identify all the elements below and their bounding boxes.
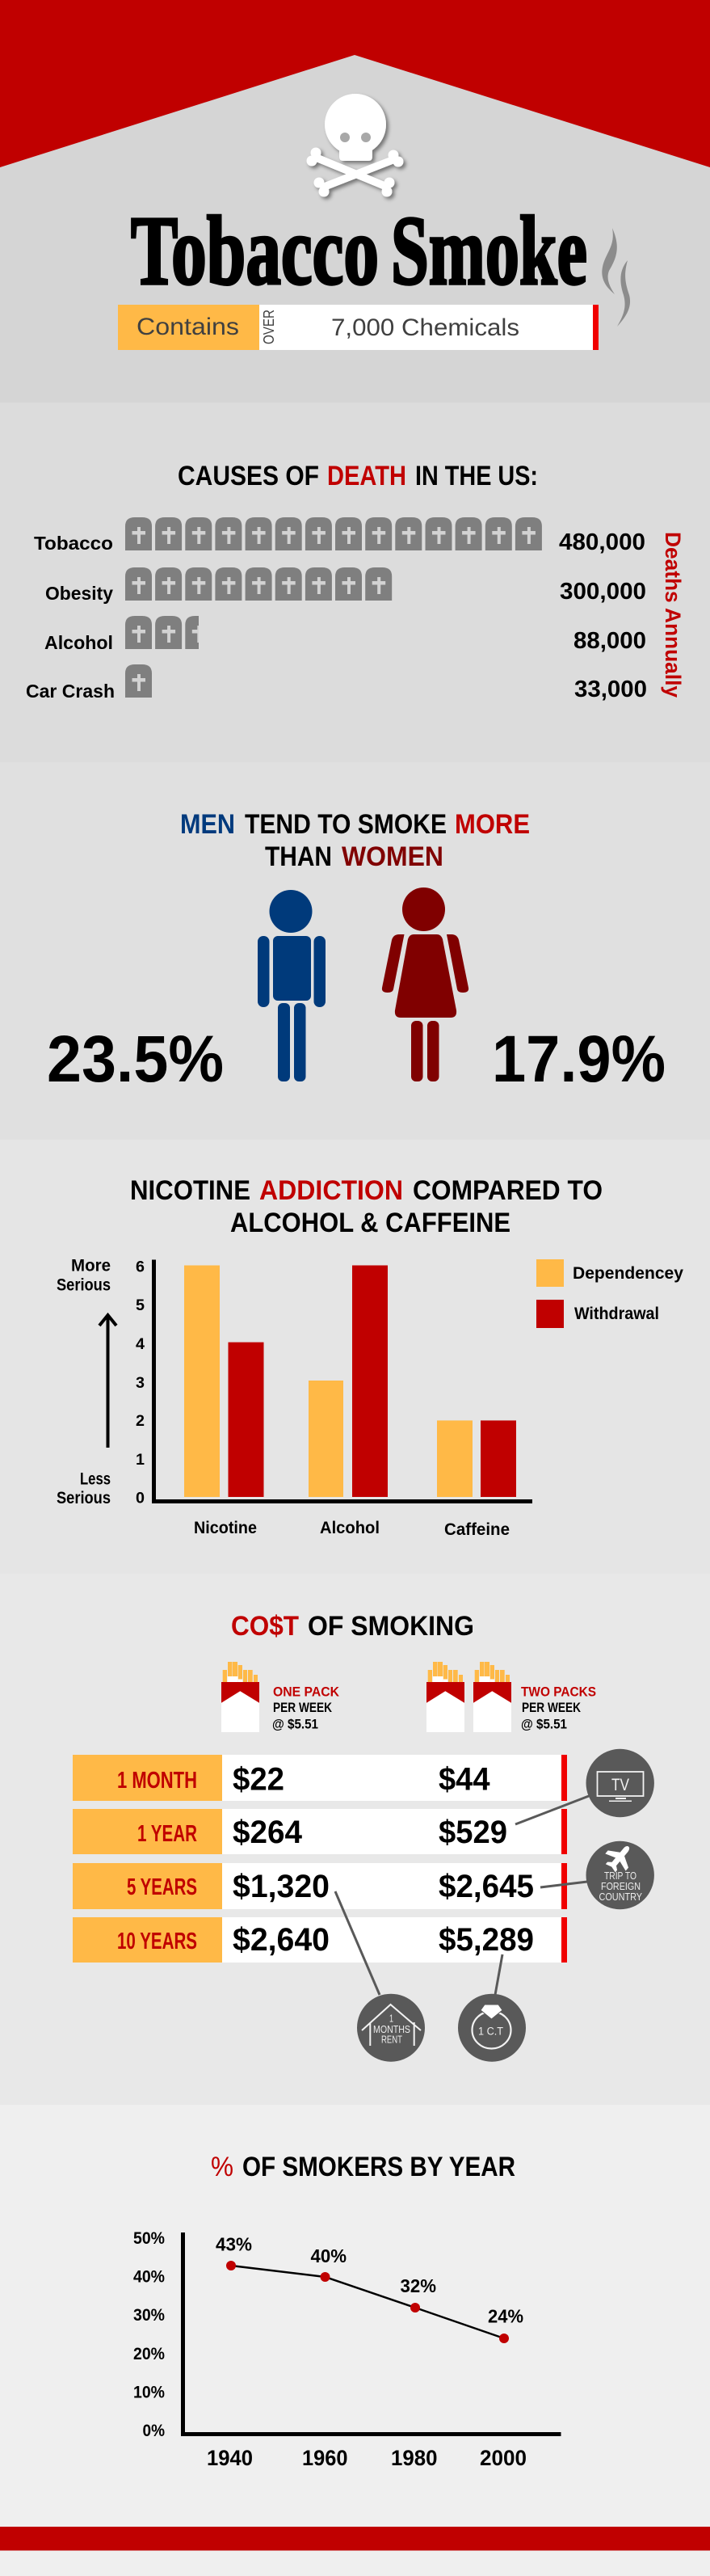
row: tobacco: [34, 517, 645, 555]
legend: Dependencey: [573, 1264, 683, 1283]
text: one pack per week: PER WEEK: [273, 1701, 332, 1715]
callout: trip to foreign country: FOREIGN: [601, 1881, 641, 1892]
row: 1 month: $44: [439, 1762, 490, 1798]
row: 10 years: $2,640: [233, 1922, 330, 1958]
heading: men tend to smoke more than women: MEN: [180, 809, 235, 840]
heading: percent of smokers: OF SMOKERS BY YEAR: [242, 2152, 515, 2182]
severity scale labels: Serious: [57, 1489, 111, 1507]
heading: percent of smokers: %: [211, 2152, 233, 2182]
icon: two packs: [426, 1662, 511, 1732]
callout: trip to foreign country: COUNTRY: [599, 1891, 643, 1903]
y axis labels: 40%: [133, 2268, 165, 2286]
bars: nicotine: [184, 1266, 263, 1497]
axis label: deaths annually: Deaths Annually: [661, 532, 685, 698]
heading: cost of smoking: [231, 1611, 474, 1642]
y axis labels: 50%: [133, 2229, 165, 2248]
row: tobacco: 480,000: [559, 529, 645, 555]
row: 5 years: [73, 1863, 567, 1909]
y axis labels: [133, 2229, 165, 2440]
severity scale labels: More: [71, 1256, 111, 1275]
row: alcohol: 88,000: [573, 628, 646, 654]
callout: trip to foreign country: TRIP TO: [604, 1870, 636, 1882]
data line: [231, 2266, 504, 2338]
legend: Withdrawal: [574, 1305, 659, 1323]
row: 1 year: $264: [233, 1815, 303, 1850]
stat: men percent: 23.5%: [47, 1022, 224, 1096]
heading: causes of death: [178, 461, 538, 491]
callout lines: [335, 1796, 589, 1995]
row: 5 years: 5 YEARS: [127, 1874, 197, 1900]
severity scale labels: [57, 1256, 111, 1507]
row: obesity: 300,000: [560, 579, 646, 605]
y axis labels: 20%: [133, 2345, 165, 2363]
row: tobacco: Tobacco: [34, 533, 113, 554]
callout: tv: TV: [611, 1776, 629, 1794]
text: two packs per week: @ $5.51: [521, 1717, 567, 1731]
legend: [536, 1259, 683, 1328]
y axis labels: 5: [136, 1297, 145, 1314]
panel: percent of smokers by year: [133, 2152, 561, 2470]
value labels: 43%: [216, 2234, 252, 2255]
year labels: 1940: [207, 2446, 253, 2470]
row: car crash: Car Crash: [26, 681, 115, 702]
heading: men tend to smoke more than women: WOMEN: [342, 841, 443, 872]
cigarette bar: contains over 7,000 chemicals: Contains: [137, 314, 239, 340]
year labels: 1960: [302, 2446, 347, 2470]
panel: causes of death: [26, 461, 685, 702]
panel: nicotine addiction: [57, 1175, 683, 1539]
icon: smoke wisps: [602, 228, 630, 327]
year labels: 2000: [480, 2446, 527, 2470]
y axis labels: [136, 1259, 145, 1507]
row: car crash: [26, 664, 647, 702]
row: obesity: Obesity: [45, 583, 113, 604]
text: two packs per week: PER WEEK: [522, 1701, 581, 1715]
y axis labels: 10%: [133, 2383, 165, 2402]
category labels: [194, 1519, 510, 1539]
icon: woman: [382, 887, 468, 1081]
y axis labels: 3: [136, 1375, 145, 1392]
heading: nicotine addiction compared: NICOTINE: [130, 1175, 250, 1206]
row: 1 year: 1 YEAR: [137, 1821, 197, 1847]
callout: tv: [586, 1749, 654, 1817]
heading: causes of death: DEATH: [327, 461, 406, 491]
line chart: [133, 2229, 561, 2470]
data points: [226, 2261, 509, 2343]
heading: men tend to smoke more than women: TEND TO SMOKE: [245, 809, 447, 840]
y axis labels: 0%: [142, 2422, 165, 2440]
category labels: Nicotine: [194, 1519, 257, 1537]
severity scale labels: Serious: [57, 1275, 111, 1295]
axes: [181, 2232, 561, 2436]
text: one pack per week: [272, 1684, 339, 1731]
severity scale labels: Less: [80, 1469, 111, 1489]
heading: causes of death: IN THE US:: [415, 461, 538, 491]
y axis labels: 1: [136, 1452, 145, 1469]
category labels: Alcohol: [320, 1519, 380, 1537]
title: Smoke: [391, 196, 587, 306]
y axis labels: 0: [136, 1490, 145, 1507]
text: one pack per week: ONE PACK: [273, 1684, 339, 1699]
cigarette bar: contains over 7,000 chemicals: OVER: [261, 310, 277, 344]
category labels: Caffeine: [444, 1520, 510, 1539]
row: 1 year: $529: [439, 1815, 507, 1850]
y axis labels: 30%: [133, 2306, 165, 2325]
bar chart: [136, 1259, 532, 1539]
axes: [152, 1259, 532, 1503]
row: car crash: 33,000: [574, 677, 647, 702]
bars: alcohol: [309, 1266, 388, 1497]
row: alcohol: Alcohol: [44, 632, 113, 653]
panel: men vs women: [47, 809, 666, 1096]
row: 5 years: $2,645: [439, 1869, 534, 1904]
heading: cost of smoking: OF SMOKING: [308, 1611, 474, 1642]
icon: skull and crossbones: [307, 94, 404, 197]
bars: caffeine: [437, 1420, 516, 1497]
callout: 1 months rent: [357, 1994, 425, 2062]
title: Tobacco: [131, 196, 379, 306]
callout: 1 months rent: MONTHS: [373, 2024, 410, 2035]
heading: men tend to smoke more than women: [180, 809, 530, 872]
heading: nicotine addiction compared: COMPARED TO: [413, 1175, 603, 1206]
row: 1 month: 1 MONTH: [117, 1768, 197, 1794]
callout: 1 carat ring: 1 C.T: [478, 2025, 503, 2037]
cigarette bar: contains over 7,000 chemicals: 7,000 Chemicals: [331, 314, 519, 341]
row: 5 years: $1,320: [233, 1869, 330, 1904]
row: 10 years: $5,289: [439, 1922, 534, 1958]
pack lid red chevron: [0, 0, 710, 167]
row: 10 years: [73, 1917, 567, 1963]
text: two packs per week: TWO PACKS: [521, 1684, 596, 1699]
row: alcohol: [44, 616, 646, 654]
heading: causes of death: CAUSES OF: [178, 461, 319, 491]
row: 1 month: $22: [233, 1762, 284, 1798]
value labels: 40%: [310, 2245, 347, 2266]
heading: nicotine addiction compared: ALCOHOL & CAFFEINE: [230, 1208, 510, 1238]
y axis labels: 4: [136, 1336, 145, 1353]
panel: header: [0, 0, 710, 350]
stat: women percent: 17.9%: [492, 1022, 666, 1096]
cigarette bar: contains over 7,000 chemicals: [118, 305, 599, 350]
year labels: [207, 2446, 527, 2470]
row: 10 years: 10 YEARS: [117, 1929, 197, 1954]
callout: trip to foreign country: [586, 1838, 654, 1909]
heading: men tend to smoke more than women: MORE: [455, 809, 530, 840]
y axis labels: 6: [136, 1259, 145, 1275]
heading: nicotine addiction compared: ADDICTION: [259, 1175, 403, 1206]
row: 1 year: [73, 1809, 567, 1854]
callout: 1 months rent: 1: [389, 2013, 393, 2024]
icon: man: [258, 890, 326, 1081]
footer red band: [0, 2527, 710, 2551]
row: 1 month: [73, 1755, 567, 1801]
value labels: 24%: [488, 2305, 523, 2326]
y axis labels: 2: [136, 1413, 145, 1430]
text: two packs per week: [521, 1684, 596, 1731]
value labels: 32%: [401, 2275, 436, 2296]
text: one pack per week: @ $5.51: [272, 1717, 318, 1731]
callout: 1 carat ring: [458, 1994, 526, 2062]
heading: men tend to smoke more than women: THAN: [265, 841, 332, 872]
arrow: severity: [99, 1315, 116, 1448]
heading: cost of smoking: CO$T: [231, 1611, 299, 1642]
year labels: 1980: [391, 2446, 438, 2470]
panel: cost of smoking: [73, 1611, 654, 2062]
callout: 1 months rent: RENT: [381, 2034, 402, 2046]
value labels: [216, 2234, 523, 2326]
icon: one pack: [221, 1662, 259, 1732]
heading: nicotine addiction compared: [130, 1175, 603, 1238]
row: obesity: [45, 567, 646, 605]
